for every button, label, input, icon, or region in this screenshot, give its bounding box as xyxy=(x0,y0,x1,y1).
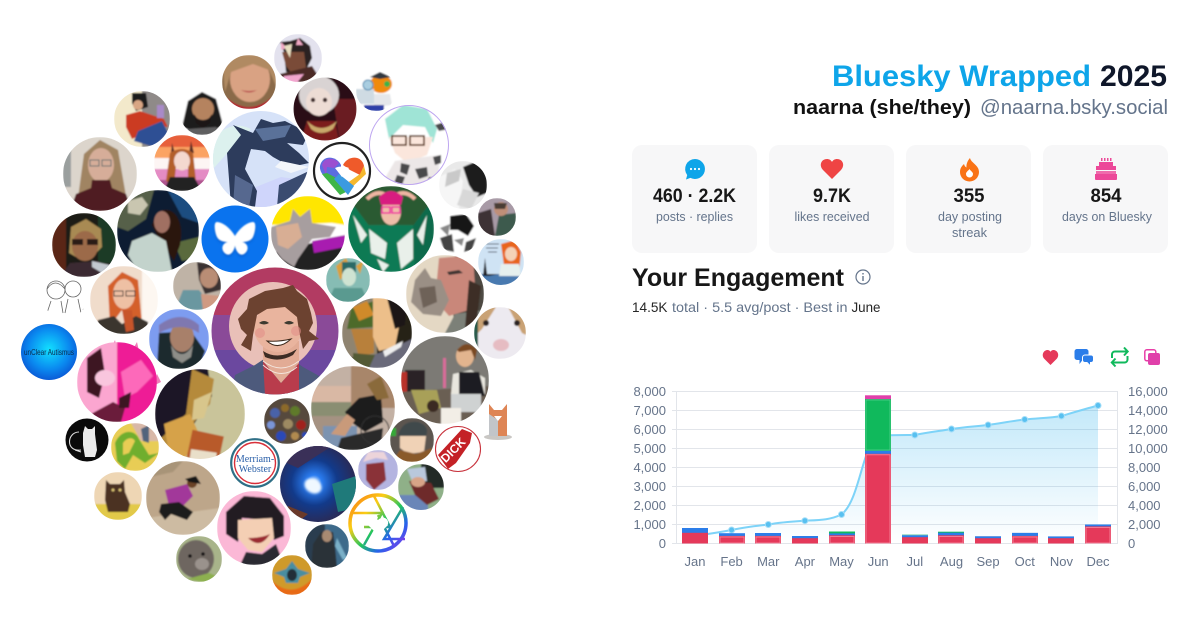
avatar: pink-haired comic man xyxy=(358,450,398,490)
cumulative line xyxy=(695,406,1098,536)
right axis labels: 16,000 xyxy=(1128,384,1168,399)
avatar: mint-haired cow girl xyxy=(369,105,449,186)
avatar: bearded cartoon man xyxy=(180,91,224,135)
avatar: laughing anime boy xyxy=(217,491,291,565)
icon: flame xyxy=(960,158,979,182)
avatar: armored hero xyxy=(305,524,349,568)
left axis labels: 5,000 xyxy=(633,441,666,456)
icon: heart xyxy=(821,159,843,179)
avatar: smiling blonde woman xyxy=(222,55,276,109)
avatar: Merriam-Webster logo: Webster xyxy=(239,464,272,475)
line markers xyxy=(729,402,1101,533)
engagement summary: total · 5.5 avg/post · Best in xyxy=(672,299,848,315)
icon: replies chat xyxy=(1074,349,1094,366)
icon: info xyxy=(856,270,870,284)
month labels: May xyxy=(829,554,854,569)
panel: day posting streak: 355 xyxy=(954,186,985,207)
avatar: child at birthday table xyxy=(401,336,489,424)
right axis labels: 14,000 xyxy=(1128,403,1168,418)
right axis labels: 0 xyxy=(1128,536,1135,551)
panel: day posting streak: streak xyxy=(952,225,987,240)
month labels: Feb xyxy=(720,554,743,569)
avatar: red stamp logo: DICK xyxy=(438,435,469,465)
engagement summary: 14.5K xyxy=(632,299,668,315)
title: Bluesky Wrapped 2025: Bluesky Wrapped xyxy=(832,60,1091,93)
panel: days on Bluesky: days on Bluesky xyxy=(1062,209,1152,224)
left axis labels: 1,000 xyxy=(633,517,666,532)
avatar: blue orb with text: unClear Autismus xyxy=(24,347,74,357)
avatar: manga couple sketch xyxy=(439,161,487,209)
avatar: white cat logo on black xyxy=(66,418,108,462)
avatar: line sketch of two people xyxy=(46,280,84,314)
cumulative area xyxy=(695,406,1098,544)
avatar: painted sleeping figure xyxy=(398,464,444,511)
avatar: girl with laptop xyxy=(478,239,524,286)
icon: speech bubble xyxy=(685,159,705,180)
right axis labels: 2,000 xyxy=(1128,517,1161,532)
avatar: man with glasses in dark room xyxy=(52,213,116,277)
avatar: colourful glass beads xyxy=(264,398,310,444)
avatar: green dragon on yellow xyxy=(111,423,159,471)
panel: posts and replies xyxy=(632,145,757,253)
month labels: Apr xyxy=(795,554,816,569)
avatar: woman in green leaf suit xyxy=(348,186,434,272)
user name and handle: @naarna.bsky.social xyxy=(980,97,1168,119)
left axis labels: 0 xyxy=(659,536,666,551)
engagement summary xyxy=(632,299,881,315)
avatar: main profile portrait xyxy=(211,267,339,395)
month labels xyxy=(685,554,1110,569)
avatar: blue orb with text xyxy=(21,324,77,380)
heading: Your Engagement: Your Engagement xyxy=(632,264,845,292)
avatar: orange pumpkin creature xyxy=(272,555,312,595)
icon: birthday cake xyxy=(1095,158,1117,180)
month labels: Jul xyxy=(906,554,923,569)
right axis labels xyxy=(1128,384,1168,551)
left axis labels xyxy=(633,384,666,551)
left axis labels: 8,000 xyxy=(633,384,666,399)
month labels: Sep xyxy=(977,554,1000,569)
avatar: teal soldier xyxy=(326,258,370,302)
month labels: Mar xyxy=(757,554,780,569)
avatar: embracing couple xyxy=(478,198,516,236)
avatar: brown kitten xyxy=(94,472,142,520)
icon: reposts arrows xyxy=(1112,348,1128,366)
avatar: wombat xyxy=(176,536,222,583)
right axis labels: 10,000 xyxy=(1128,441,1168,456)
avatar: guinea pig xyxy=(474,307,526,359)
panel: posts and replies: posts · replies xyxy=(656,209,733,224)
panel: posts and replies: 460 · 2.2K xyxy=(653,186,736,207)
avatar: pink split character xyxy=(77,340,161,422)
avatar: orange owl with laptop xyxy=(356,71,396,111)
month labels: Dec xyxy=(1086,554,1110,569)
month labels: Jan xyxy=(685,554,705,569)
legend icons xyxy=(1043,348,1160,366)
panel: days on Bluesky xyxy=(1043,145,1168,253)
month labels: Aug xyxy=(940,554,963,569)
left axis labels: 4,000 xyxy=(633,460,666,475)
avatar: woman in turtleneck xyxy=(63,137,137,211)
avatar: lesbian flag horned woman xyxy=(154,135,210,191)
avatar: woman on rocks xyxy=(146,461,220,535)
panel: day posting streak: day posting xyxy=(938,209,1002,224)
avatar: dog on blanket xyxy=(155,369,245,464)
avatar: manga line art xyxy=(438,214,478,254)
avatar: orange-haired woman xyxy=(90,266,158,334)
right axis labels: 4,000 xyxy=(1128,498,1161,513)
panel: likes received: 9.7K xyxy=(813,186,851,207)
icon: quotes squares xyxy=(1145,350,1160,365)
left axis labels: 3,000 xyxy=(633,479,666,494)
avatar: red sweater drawing xyxy=(114,91,170,147)
avatar: Bluesky butterfly xyxy=(202,206,268,272)
panel: avatar bubble cluster xyxy=(21,34,526,595)
avatar: woman kissing cat xyxy=(406,255,484,333)
avatar: orange fox figure xyxy=(484,404,512,440)
chart: monthly engagement bars and cumulative line xyxy=(633,384,1168,569)
panel: likes received xyxy=(769,145,894,253)
avatar: rainbow heart ring xyxy=(314,143,370,199)
panel: day posting streak xyxy=(906,145,1031,253)
month labels: Jun xyxy=(868,554,889,569)
avatar: blue dragon xyxy=(213,111,309,207)
right axis labels: 12,000 xyxy=(1128,422,1168,437)
avatar: doll with white hair xyxy=(293,76,357,141)
avatar: wolf on flag xyxy=(271,196,345,270)
avatar: woman in wheelchair xyxy=(311,366,395,450)
title: Bluesky Wrapped 2025: 2025 xyxy=(1100,60,1167,93)
engagement summary: June xyxy=(852,299,881,315)
avatar: woman with floral dress xyxy=(173,262,221,310)
left axis labels: 7,000 xyxy=(633,403,666,418)
avatar: anime man with beanie xyxy=(390,418,434,462)
user name and handle xyxy=(793,97,1168,119)
panel: likes received: likes received xyxy=(794,209,870,224)
month labels: Nov xyxy=(1050,554,1073,569)
avatar: red stamp logo xyxy=(436,426,480,472)
avatar: Merriam-Webster logo xyxy=(230,438,280,488)
left axis labels: 6,000 xyxy=(633,422,666,437)
right axis labels: 6,000 xyxy=(1128,479,1161,494)
right axis labels: 8,000 xyxy=(1128,460,1161,475)
avatar: cat-eared man xyxy=(274,34,322,84)
left axis labels: 2,000 xyxy=(633,498,666,513)
stacked bars xyxy=(682,395,1111,544)
avatar: rainbow lens heart logo xyxy=(350,495,406,551)
month labels: Oct xyxy=(1015,554,1035,569)
avatar: glowing blue orb scene xyxy=(280,446,356,522)
panel: days on Bluesky: 854 xyxy=(1090,186,1122,207)
avatar: woman among flowers xyxy=(117,190,199,272)
avatar: helmeted men comic xyxy=(342,298,412,368)
avatar: man with flower crown xyxy=(149,309,209,369)
user name and handle: naarna (she/they) xyxy=(793,97,971,119)
avatar: Merriam-Webster logo: Merriam- xyxy=(236,454,274,465)
icon: likes heart xyxy=(1043,350,1058,365)
